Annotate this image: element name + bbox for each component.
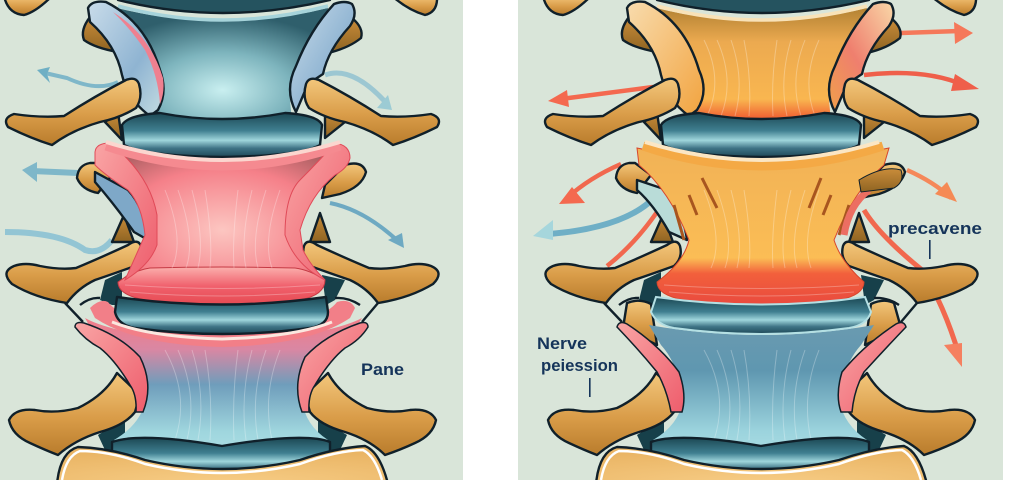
vertebra 2 rim: pink	[118, 267, 325, 305]
bone: lower facets and processes	[548, 301, 975, 455]
blue ligament band	[95, 172, 148, 240]
disc 1	[661, 113, 861, 157]
ligament right: lower	[838, 323, 906, 412]
vertebra 1 body: teal	[117, 8, 328, 122]
panel background: left	[0, 0, 463, 480]
blue strand under the left ligament	[637, 180, 687, 240]
vertebra 3 lower disc	[651, 438, 869, 476]
top disc	[657, 0, 869, 13]
vertebra 1 body: orange	[656, 8, 867, 122]
bone: upper processes	[543, 0, 976, 140]
vertebra 3 lower disc	[112, 438, 330, 476]
ligament left: lower	[617, 323, 684, 412]
panel: left spine	[4, 0, 439, 480]
panel: right spine	[533, 0, 979, 480]
fibres	[704, 40, 819, 116]
disc 2	[115, 297, 328, 334]
bone: upper processes	[4, 0, 437, 140]
vertebra 1 rim	[657, 6, 867, 20]
bottom vertebra highlight	[601, 450, 921, 480]
ligament right: blue	[290, 2, 355, 112]
bone: middle facets and processes	[545, 163, 978, 322]
ligament right: lower	[298, 322, 368, 412]
bottom vertebra highlight	[62, 450, 382, 480]
vertebra 2 top lip	[643, 142, 883, 166]
transverse process 1	[6, 79, 439, 145]
ligament stripe: pink	[113, 12, 164, 104]
top disc	[118, 0, 330, 13]
arrows: right spine	[533, 22, 979, 367]
panel background: right	[518, 0, 1003, 480]
vertebra 3 lip highlight	[112, 322, 332, 339]
fibres	[165, 350, 280, 440]
disc 2	[651, 297, 871, 334]
leader line: precavene	[929, 240, 931, 259]
vertebra 3 body: blue	[649, 325, 874, 476]
facet right: over ligament	[859, 169, 902, 192]
vertebra 1 rim	[118, 6, 328, 20]
ligament left: orange	[627, 2, 704, 116]
label: Pane: Pane	[361, 361, 404, 379]
fibres	[125, 190, 320, 296]
ligament left: pink	[95, 143, 157, 280]
vertebra 2 top lip	[106, 142, 340, 166]
vertebra 2 body: pink	[110, 145, 335, 282]
bone: middle facets and processes	[6, 163, 439, 322]
ligament right: orange red	[829, 2, 894, 112]
disc 1	[122, 113, 322, 157]
blue arrows: left spine	[5, 67, 404, 251]
bottom vertebra	[57, 446, 388, 480]
bone: lower processes	[9, 373, 436, 455]
vertebra 3 body: pink to blue	[85, 318, 362, 476]
label: Nerve: Nerve	[537, 334, 587, 353]
leader line: peiession	[589, 378, 591, 397]
transverse process 1	[545, 79, 978, 145]
bottom vertebra	[596, 446, 927, 480]
ligament right: pink	[285, 143, 350, 280]
vertebra 2 body: orange	[637, 148, 889, 305]
fibres and slits	[664, 178, 869, 296]
ligament left: lower	[75, 322, 148, 412]
vertebra 3 top lip	[90, 301, 355, 347]
label: peiession: peiession	[541, 356, 618, 375]
fibres	[704, 350, 819, 440]
ligament left: blue	[88, 2, 164, 116]
label: precavene: precavene	[888, 219, 982, 238]
